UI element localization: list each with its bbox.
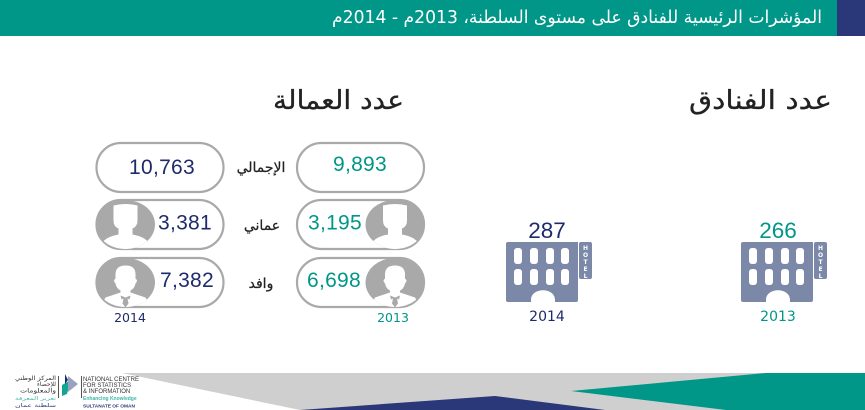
- icon: hotel building 2013: H: [818, 245, 823, 252]
- icon: hotel building 2014: [506, 242, 592, 302]
- footer decoration: [122, 373, 865, 410]
- icon: hotel building 2013: [741, 242, 827, 302]
- pill: total 2014: 10,763: [129, 156, 195, 179]
- heading: number of workers: عدد العمالة: [273, 86, 404, 116]
- label: expatriate: وافد: [249, 276, 273, 292]
- value 266: 266: [759, 218, 797, 243]
- logo: [15, 374, 139, 410]
- icon: hotel building 2014: L: [584, 273, 588, 280]
- heading: number of hotels: عدد الفنادق: [689, 86, 832, 116]
- pill: Omani 2014: 3,381: [158, 212, 212, 234]
- icon: hotel building 2013: O: [818, 252, 823, 259]
- logo: FOR STATISTICS: [83, 383, 131, 389]
- logo: SULTANATE OF OMAN: [83, 404, 135, 410]
- logo: والمعلومات: [20, 388, 56, 394]
- hotels 2013: [741, 218, 827, 325]
- logo: & INFORMATION: [83, 389, 130, 395]
- logo: Enhancing Knowledge: [83, 396, 137, 402]
- pill: total 2013: [297, 143, 424, 192]
- pill: expatriate 2014: 7,382: [160, 269, 214, 292]
- icon: hotel building 2013: T: [818, 259, 823, 266]
- pill: expatriate 2013: [297, 258, 424, 308]
- icon: expatriate person: [96, 258, 155, 308]
- pill: Omani 2014: [96, 200, 224, 250]
- icon: hotel building 2013: L: [819, 273, 823, 280]
- year label 2013: 2013: [377, 310, 409, 325]
- icon: Omani person: [366, 200, 424, 250]
- icon: hotel building 2013: E: [818, 266, 823, 273]
- label: Omani: عماني: [244, 218, 280, 234]
- icon: Omani person: [96, 200, 155, 250]
- header title: المؤشرات الرئيسية للفنادق على مستوى السلطنة، 2013م - 2014م: [332, 8, 822, 28]
- pill: Omani 2013: 3,195: [308, 212, 362, 234]
- icon: expatriate person: [366, 258, 424, 308]
- pill: expatriate 2014: [96, 258, 224, 308]
- year label 2014: 2014: [114, 310, 146, 325]
- icon: hotel building 2014: O: [583, 252, 588, 259]
- pill: expatriate 2013: 6,698: [307, 269, 361, 292]
- icon: hotel building 2014: T: [583, 259, 588, 266]
- logo: NATIONAL CENTRE: [83, 377, 139, 383]
- logo: المركز الوطني: [15, 375, 56, 382]
- logo: للإحصاء: [37, 381, 56, 388]
- icon: hotel building 2014: E: [583, 266, 588, 273]
- pill: Omani 2013: [297, 200, 424, 250]
- header bar: [0, 0, 865, 36]
- pill: total 2013: 9,893: [333, 153, 387, 176]
- hotels 2014: [506, 218, 592, 325]
- label: total: الإجمالي: [237, 160, 285, 176]
- year 2014: 2014: [529, 309, 565, 325]
- logo: سلطنة عمان: [15, 403, 56, 409]
- icon: hotel building 2014: H: [583, 245, 588, 252]
- pill: total 2014: [96, 143, 224, 192]
- year 2013: 2013: [760, 309, 796, 325]
- value 287: 287: [528, 218, 566, 243]
- logo: تعزيز المعرفة: [15, 396, 57, 402]
